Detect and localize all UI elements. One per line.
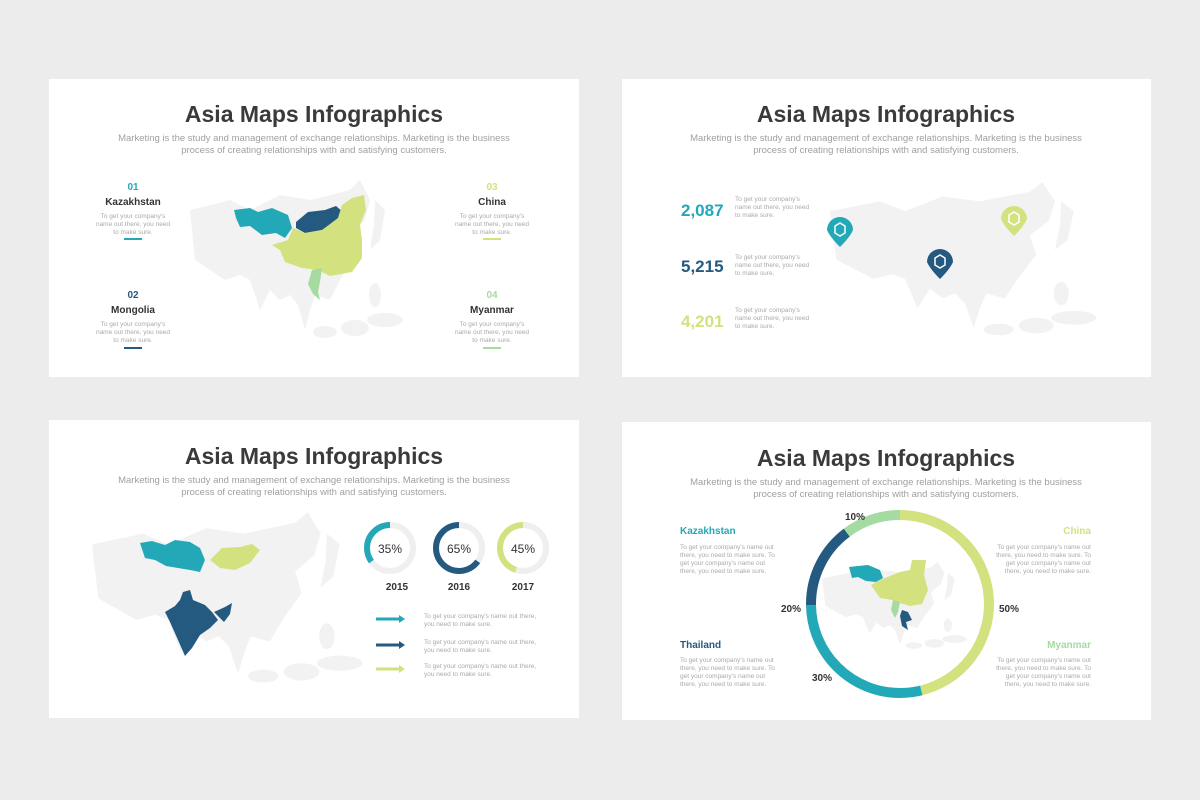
arrow item 2: you need to make sure. [424, 647, 492, 654]
chart: donut 2015 [367, 525, 413, 593]
label 20%: 20% [781, 604, 801, 615]
chart: donut 2016 [436, 525, 482, 593]
subtitle: Marketing is the study and management of exchange relationships. Marketing is the business [690, 133, 1082, 144]
text: China: there, you need to make sure. To [996, 552, 1091, 559]
item 02 Mongolia: 02 [127, 290, 139, 301]
chart: ring [811, 515, 989, 693]
item 01 Kazakhstan: To get your company's [101, 213, 165, 220]
arrow item 2: To get your company's name out there, [424, 639, 536, 646]
item 01 Kazakhstan: to make sure. [113, 229, 153, 236]
icon: pin navy [927, 249, 953, 279]
panel: bottom-left [49, 420, 579, 718]
subtitle: process of creating relationships with and satisfying customers. [181, 487, 447, 498]
stat 5,215: To get your company's [735, 254, 800, 261]
map: asia gray [830, 182, 1096, 335]
item 01 Kazakhstan [96, 182, 170, 240]
stat 5,215 [681, 254, 809, 277]
item 03 China: China [478, 197, 506, 208]
text: Kazakhstan: there, you need to make sure. [680, 568, 767, 575]
item 04 Myanmar: 04 [486, 290, 498, 301]
chart: donut 2017 [500, 525, 546, 593]
map: asia with countries [190, 180, 403, 338]
subtitle: Marketing is the study and management of exchange relationships. Marketing is the business [118, 133, 510, 144]
text: China: there, you need to make sure. [1005, 568, 1091, 575]
text: Myanmar: there, you need to make sure. To [996, 665, 1091, 672]
item 04 Myanmar: To get your company's [460, 321, 524, 328]
chart: donut 2016: 65% [447, 542, 471, 556]
text: Myanmar [996, 640, 1091, 688]
map: asia with countries [92, 512, 363, 683]
item 03 China: To get your company's [460, 213, 524, 220]
text: Thailand: there, you need to make sure. To [680, 665, 775, 672]
stat 4,201: name out there, you need [735, 315, 809, 322]
label 30%: 30% [812, 673, 832, 684]
subtitle: process of creating relationships with and satisfying customers. [753, 489, 1019, 500]
text: Kazakhstan: there, you need to make sure. To [680, 552, 775, 559]
text: China: get your company's name out [1006, 560, 1091, 567]
panel: bottom-right [622, 422, 1151, 720]
item 03 China: to make sure. [472, 229, 512, 236]
icon: pin lime [1001, 206, 1027, 236]
item 01 Kazakhstan: 01 [127, 182, 139, 193]
text: Kazakhstan: To get your company's name out [680, 544, 774, 551]
text: Myanmar: get your company's name out [1006, 673, 1091, 680]
text: Thailand: Thailand [680, 640, 721, 651]
stat 4,201: 4,201 [681, 312, 724, 331]
stat 4,201: To get your company's [735, 307, 800, 314]
stat 2,087: to make sure. [735, 212, 775, 219]
item 02 Mongolia: To get your company's [101, 321, 165, 328]
text: Thailand: there, you need to make sure. [680, 681, 767, 688]
stat 2,087: 2,087 [681, 201, 724, 220]
chart: donut 2015: 2015 [386, 582, 409, 593]
label 50%: 50% [999, 604, 1019, 615]
text: China: China [1063, 526, 1091, 537]
title: Asia Maps Infographics [185, 443, 443, 469]
stat 4,201: to make sure. [735, 323, 775, 330]
arrow item 1: To get your company's name out there, [424, 613, 536, 620]
icon: pin teal [827, 217, 853, 247]
item 02 Mongolia [96, 290, 170, 349]
item 04 Myanmar: to make sure. [472, 337, 512, 344]
text: Kazakhstan: get your company's name out [680, 560, 765, 567]
chart: donut 2015: 35% [378, 542, 402, 556]
arrow item 3 [376, 663, 536, 678]
arrow item 3: you need to make sure. [424, 671, 492, 678]
subtitle: Marketing is the study and management of exchange relationships. Marketing is the business [690, 477, 1082, 488]
stat 5,215: name out there, you need [735, 262, 809, 269]
item 01 Kazakhstan: name out there, you need [96, 221, 170, 228]
map: asia in ring [822, 560, 967, 649]
subtitle: process of creating relationships with and satisfying customers. [753, 145, 1019, 156]
text: Thailand: get your company's name out [680, 673, 765, 680]
item 04 Myanmar [455, 290, 529, 349]
text: Myanmar: To get your company's name out [997, 657, 1091, 664]
arrow item 1: you need to make sure. [424, 621, 492, 628]
item 04 Myanmar: name out there, you need [455, 329, 529, 336]
subtitle: process of creating relationships with and satisfying customers. [181, 145, 447, 156]
stat 4,201 [681, 307, 809, 331]
stat 2,087: name out there, you need [735, 204, 809, 211]
text: Kazakhstan [680, 526, 775, 575]
panel: top-right [622, 79, 1151, 377]
subtitle: Marketing is the study and management of exchange relationships. Marketing is the business [118, 475, 510, 486]
chart: donut 2016: 2016 [448, 582, 471, 593]
chart: donut 2017: 2017 [512, 582, 535, 593]
item 03 China: name out there, you need [455, 221, 529, 228]
title: Asia Maps Infographics [185, 101, 443, 127]
arrow item 1 [376, 613, 536, 628]
item 03 China [455, 182, 529, 240]
panel: top-left [49, 79, 579, 377]
label 10%: 10% [845, 512, 865, 523]
item 01 Kazakhstan: Kazakhstan [105, 197, 161, 208]
text: Kazakhstan: Kazakhstan [680, 526, 736, 537]
text: China: To get your company's name out [997, 544, 1091, 551]
item 02 Mongolia: to make sure. [113, 337, 153, 344]
stat 5,215: to make sure. [735, 270, 775, 277]
text: Myanmar: Myanmar [1047, 640, 1091, 651]
title: Asia Maps Infographics [757, 445, 1015, 471]
arrow item 2 [376, 639, 536, 654]
item 03 China: 03 [486, 182, 498, 193]
stat 5,215: 5,215 [681, 257, 724, 276]
title: Asia Maps Infographics [757, 101, 1015, 127]
text: China [996, 526, 1091, 575]
arrow item 3: To get your company's name out there, [424, 663, 536, 670]
text: Myanmar: there, you need to make sure. [1005, 681, 1091, 688]
item 02 Mongolia: Mongolia [111, 305, 155, 316]
item 02 Mongolia: name out there, you need [96, 329, 170, 336]
text: Thailand: To get your company's name out [680, 657, 774, 664]
stat 2,087 [681, 196, 809, 220]
text: Thailand [680, 640, 775, 688]
item 04 Myanmar: Myanmar [470, 305, 514, 316]
stat 2,087: To get your company's [735, 196, 800, 203]
chart: donut 2017: 45% [511, 542, 535, 556]
